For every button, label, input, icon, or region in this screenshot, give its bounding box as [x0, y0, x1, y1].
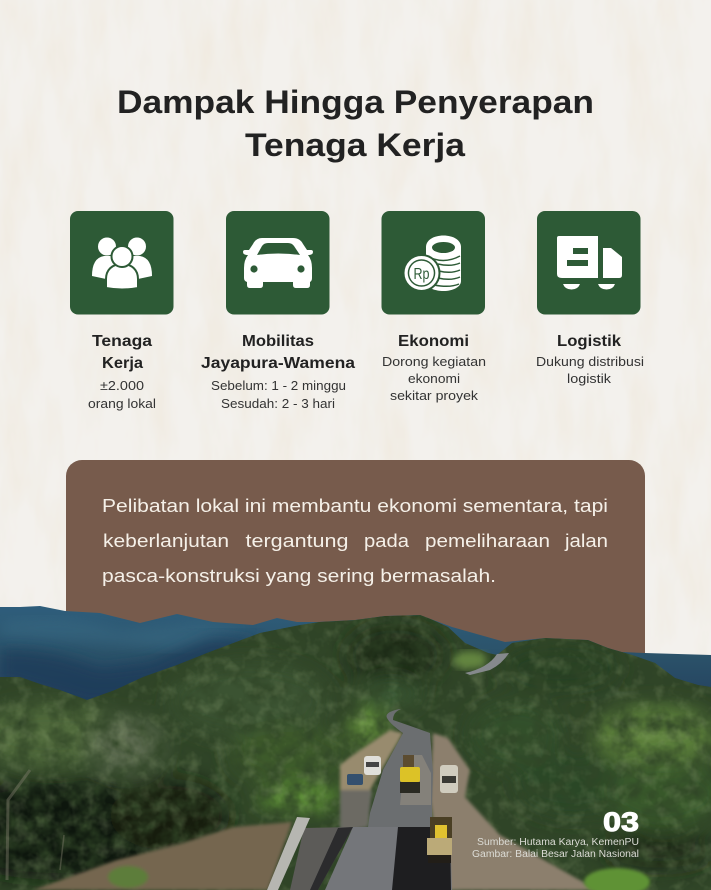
- vehicles: [347, 755, 458, 863]
- label: logistik: Dukung distribusi: [536, 355, 644, 369]
- road: [267, 709, 452, 890]
- distant road: [453, 651, 509, 675]
- label: logistik: Logistik: [557, 333, 621, 350]
- panel: mobilitas: [201, 211, 355, 411]
- label: ekonomi: Ekonomi: [398, 333, 469, 350]
- label: logistik: [536, 333, 644, 386]
- tree trunks: [7, 770, 64, 880]
- photo: forest road: [0, 600, 711, 890]
- callout: brown panel: tergantung: [246, 531, 348, 551]
- callout: brown panel: Pelibatan lokal ini membantu ekonomi sementara, tapi: [102, 496, 608, 516]
- callout: brown panel: keberlanjutan: [103, 531, 229, 551]
- callout: brown panel: pasca-konstruksi yang sering bermasalah.: [102, 566, 496, 586]
- label: tenaga kerja: orang lokal: [88, 397, 156, 411]
- label: ekonomi: [382, 333, 486, 403]
- label: mobilitas: [201, 333, 355, 411]
- callout: brown panel: [66, 460, 645, 670]
- title: Dampak Hingga Penyerapan: [117, 84, 594, 120]
- ground: [33, 730, 600, 890]
- panel: ekonomi: [382, 211, 486, 403]
- source credits: [472, 837, 639, 860]
- panel: logistik: [536, 211, 644, 386]
- icon: coins: Rp: [414, 266, 430, 283]
- callout: brown panel: pada: [364, 531, 410, 551]
- label: logistik: logistik: [567, 372, 612, 386]
- icon: people: [70, 211, 174, 314]
- title: [117, 84, 594, 163]
- title: Tenaga Kerja: [245, 127, 465, 163]
- icon: truck: [537, 211, 640, 314]
- label: tenaga kerja: ±2.000: [100, 379, 144, 393]
- label: ekonomi: Dorong kegiatan: [382, 355, 486, 369]
- label: mobilitas: Mobilitas: [242, 333, 314, 350]
- source credits: Sumber: Hutama Karya, KemenPU: [477, 837, 639, 848]
- label: mobilitas: Sebelum: 1 - 2 minggu: [211, 379, 346, 393]
- icon: car: [226, 211, 330, 314]
- label: tenaga kerja: Tenaga: [92, 333, 152, 350]
- label: tenaga kerja: [88, 333, 156, 411]
- source credits: Gambar: Balai Besar Jalan Nasional: [472, 849, 639, 860]
- callout: brown panel: pemeliharaan: [425, 531, 550, 551]
- label: mobilitas: Sesudah: 2 - 3 hari: [221, 397, 335, 411]
- panel: tenaga kerja: [70, 211, 174, 411]
- label: tenaga kerja: Kerja: [102, 355, 143, 372]
- page number: 03: [603, 807, 639, 837]
- label: mobilitas: Jayapura-Wamena: [201, 355, 355, 372]
- label: ekonomi: sekitar proyek: [390, 389, 479, 403]
- icon: coins: [382, 211, 485, 314]
- callout: brown panel: jalan: [564, 531, 608, 551]
- forest: [0, 610, 711, 890]
- mountains: [0, 606, 711, 700]
- foreground grass: [584, 868, 650, 890]
- label: ekonomi: ekonomi: [408, 372, 460, 386]
